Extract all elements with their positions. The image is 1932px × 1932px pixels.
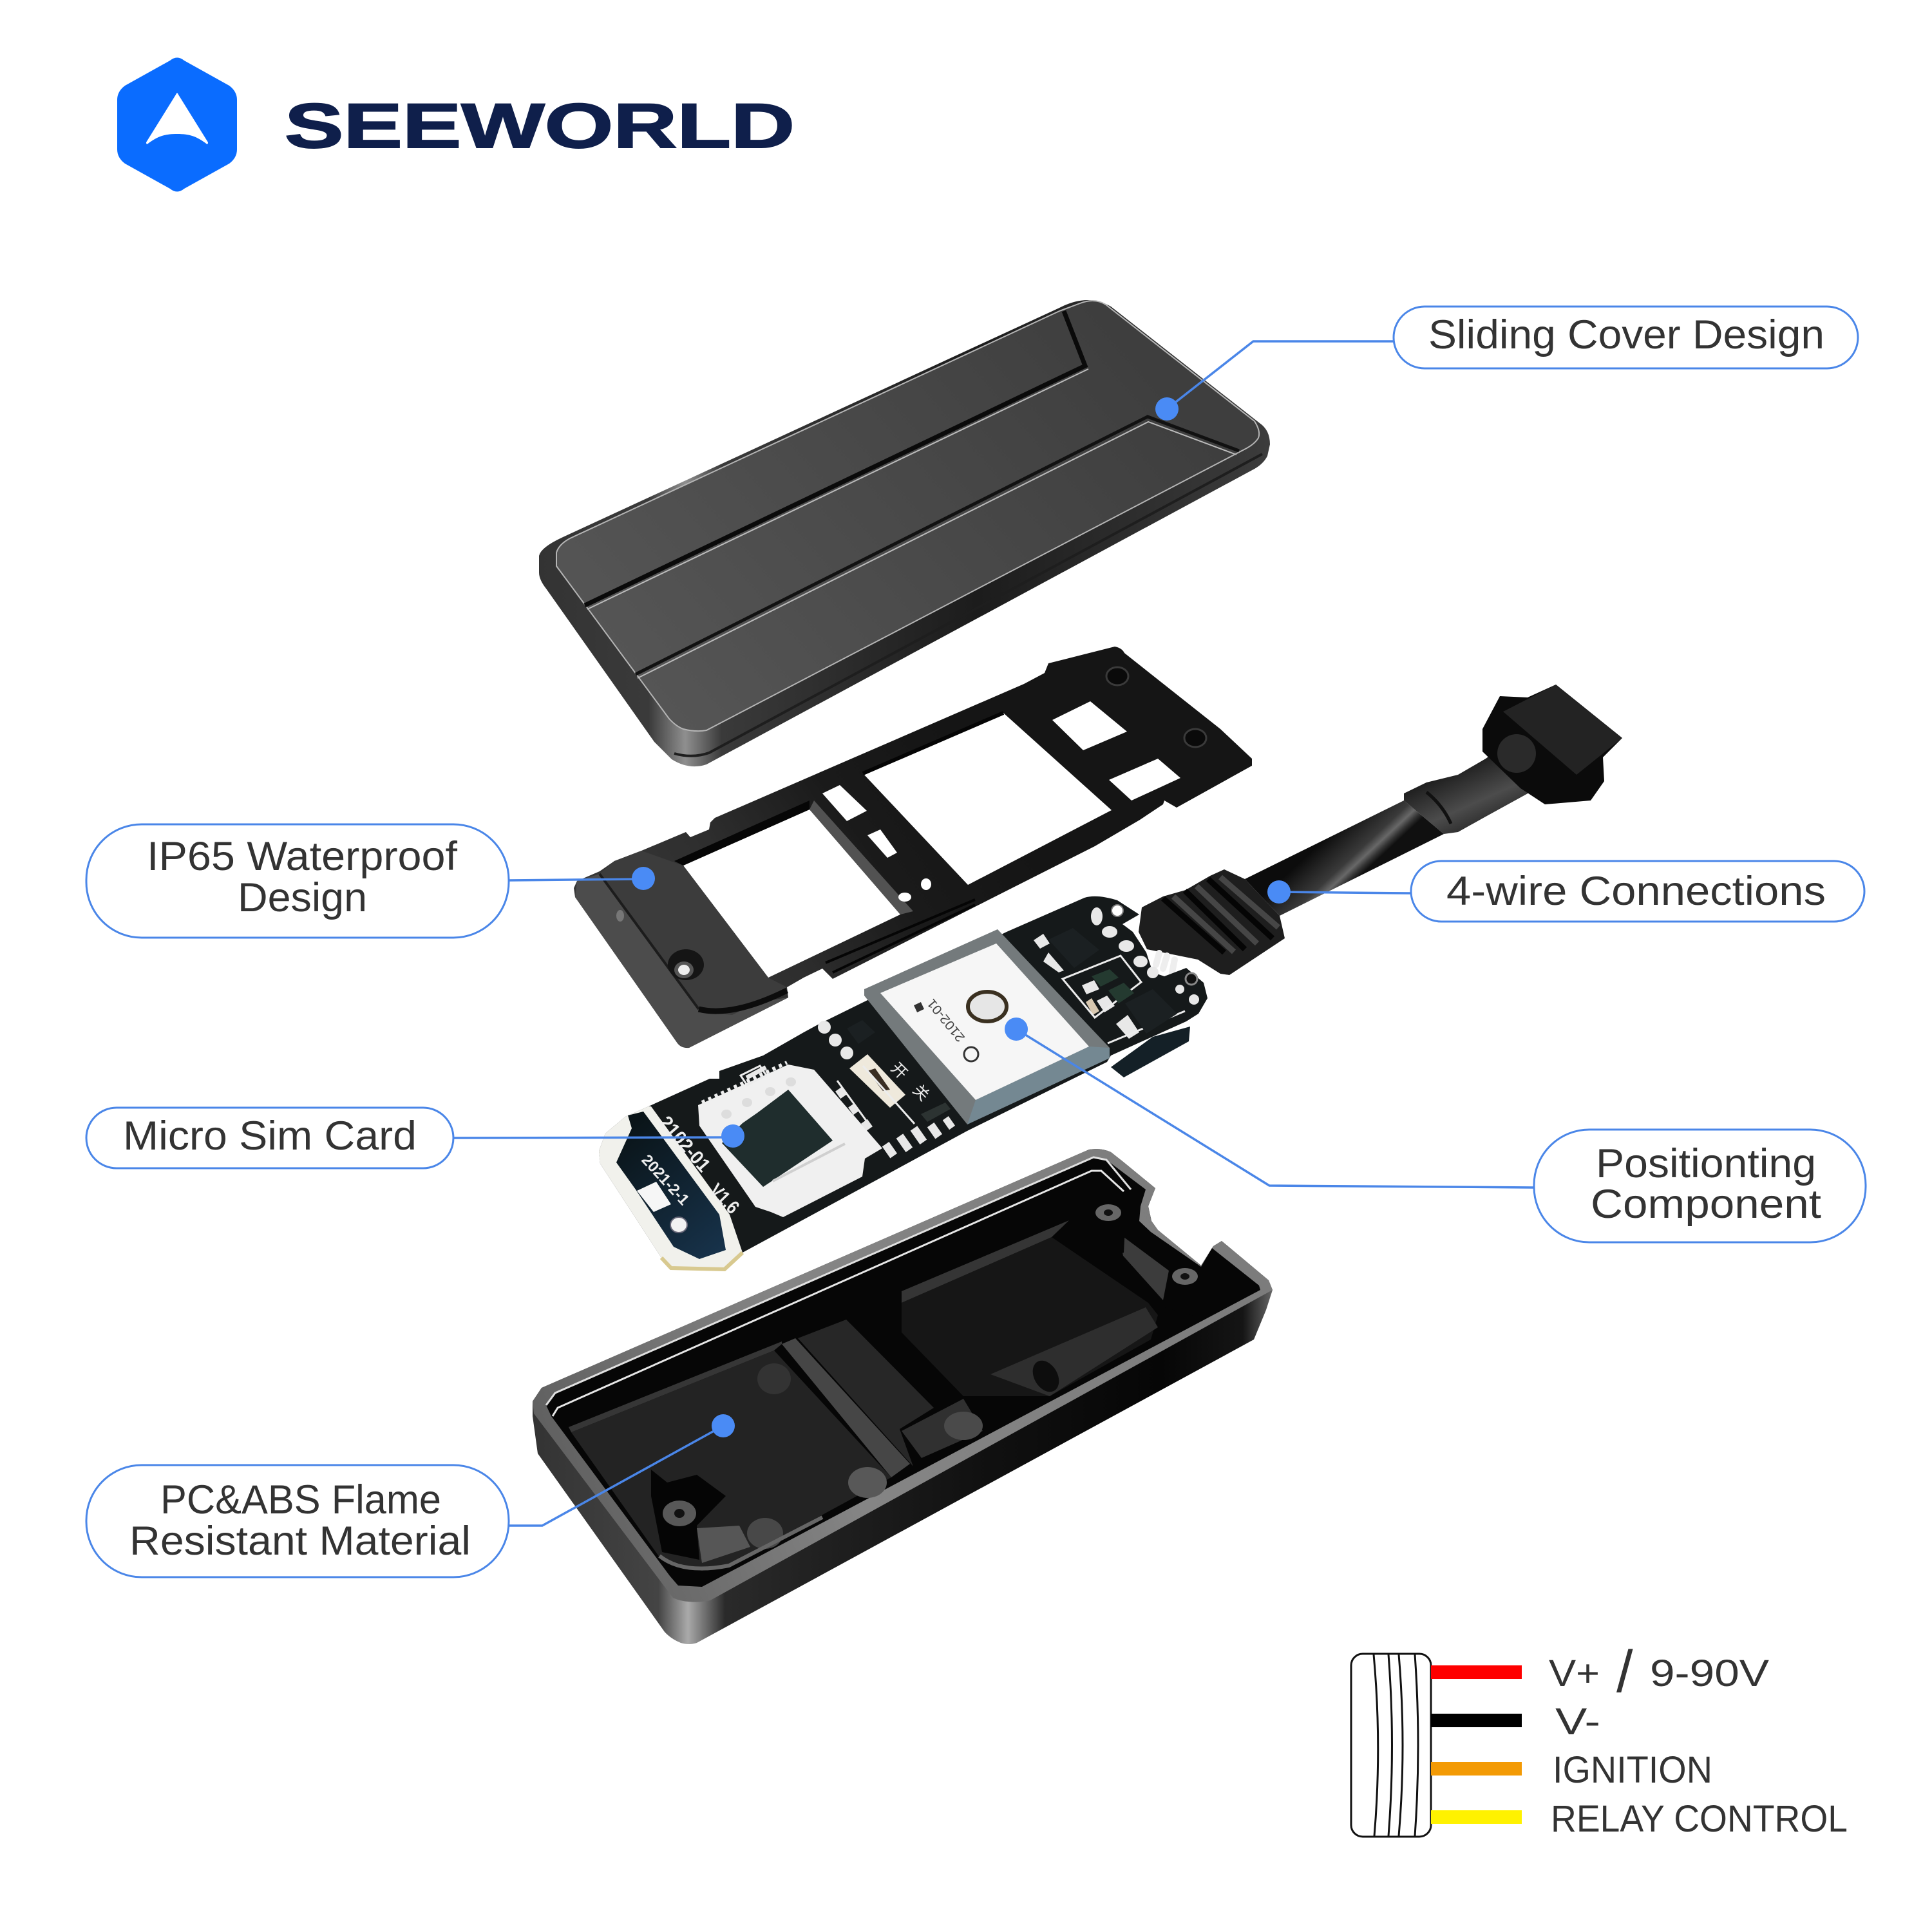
logo: [117, 58, 795, 192]
case floor middle: [798, 1320, 934, 1466]
wire: black: [1431, 1714, 1522, 1727]
case rear posts: [1095, 1214, 1126, 1259]
panel: sliding cover: [539, 300, 1270, 766]
wire: orange: [1431, 1762, 1522, 1776]
frame outer lip: [575, 874, 788, 1048]
silkscreen outlines: [741, 956, 1185, 1124]
case column: [782, 1338, 910, 1477]
wire label: power: 9-90V: [1650, 1653, 1769, 1694]
chips: [847, 928, 1177, 1122]
rear capacitor: [1111, 1027, 1190, 1077]
cable: [1245, 800, 1444, 916]
callout: 4-wire connections: 4-wire Connections: [1446, 869, 1826, 914]
small components: [746, 907, 1199, 1158]
callout: positioning component: Positionting: [1596, 1141, 1816, 1186]
callout: positioning component: Component: [1591, 1182, 1822, 1227]
callout: micro sim card: [86, 1108, 744, 1168]
callout: IP65 waterproof design: Design: [238, 875, 367, 920]
white wires: [1156, 953, 1175, 972]
panel: circuit board: 关: [909, 1081, 933, 1104]
wire label: power: /: [1616, 1639, 1633, 1705]
case floor discs: [747, 1518, 783, 1549]
sim holder: [698, 1065, 882, 1217]
callout: PC and ABS material: PC&ABS Flame: [160, 1477, 441, 1522]
board end gold edge: [661, 1253, 743, 1269]
case side walls: [533, 1149, 1273, 1644]
panel: circuit board: V1.6: [705, 1180, 743, 1218]
frame window walls: [674, 800, 810, 866]
wire: yellow: [1431, 1810, 1522, 1824]
callout: 4-wire connections: [1267, 861, 1864, 922]
callout: PC and ABS material: Resistant Material: [129, 1519, 471, 1564]
panel: waterproof frame: [574, 647, 1252, 1048]
frame raised plate: [600, 851, 787, 1015]
sleeve: [1404, 750, 1536, 834]
panel: circuit board: 2021-2-1: [638, 1151, 692, 1209]
case cavity: [546, 1157, 1260, 1587]
cover slit upper: [585, 311, 1085, 605]
sim card: [722, 1090, 833, 1187]
wiring legend: [1351, 1639, 1848, 1840]
grommet: [1139, 869, 1285, 975]
wire: red: [1431, 1665, 1522, 1679]
switch: [849, 1054, 905, 1108]
wire label: relay control: RELAY CONTROL: [1551, 1798, 1848, 1840]
callout: PC and ABS material: [86, 1414, 735, 1577]
wire label: ground: V-: [1555, 1701, 1600, 1743]
wordmark: SEEWORLD: [285, 90, 795, 161]
case floor left: [571, 1350, 891, 1571]
icon: connector: [1351, 1654, 1431, 1837]
callout: micro sim card: Micro Sim Card: [123, 1113, 417, 1159]
case floor right: [902, 1220, 1069, 1303]
gps antenna: [864, 929, 1110, 1124]
panel: bottom case: [533, 1149, 1273, 1644]
callout: IP65 waterproof design: IP65 Waterproof: [147, 834, 458, 879]
callout: sliding cover design: [1155, 307, 1858, 421]
screw holes: [1106, 667, 1128, 685]
gps antenna: 2102-01: [925, 996, 968, 1045]
board end blue area: [616, 1112, 726, 1259]
icon: blue hexagon with arrow: [117, 58, 237, 192]
callout: sliding cover design: Sliding Cover Design: [1428, 312, 1824, 357]
antenna ring: [968, 992, 1007, 1021]
board end metal: [599, 1106, 743, 1269]
silkscreen characters: 开: [887, 1059, 911, 1083]
panel: circuit board: [599, 896, 1208, 1269]
callout: IP65 waterproof design: [86, 824, 655, 938]
panel: cable and plug: [1139, 685, 1622, 975]
case floor strip: [569, 1341, 782, 1432]
board: [599, 896, 1208, 1269]
wire label: power: V+: [1549, 1653, 1600, 1694]
callout: positioning component: [1005, 1018, 1866, 1242]
wire label: ignition: IGNITION: [1553, 1749, 1712, 1791]
case white inner edges: [546, 1157, 1131, 1405]
case rim: [533, 1149, 1273, 1602]
board labels: 2102-01: [655, 1112, 714, 1176]
cover slit lower: [636, 417, 1239, 674]
board mounting holes: [1112, 905, 1123, 916]
case screw boss: [651, 1470, 726, 1560]
plug: [1482, 685, 1622, 804]
